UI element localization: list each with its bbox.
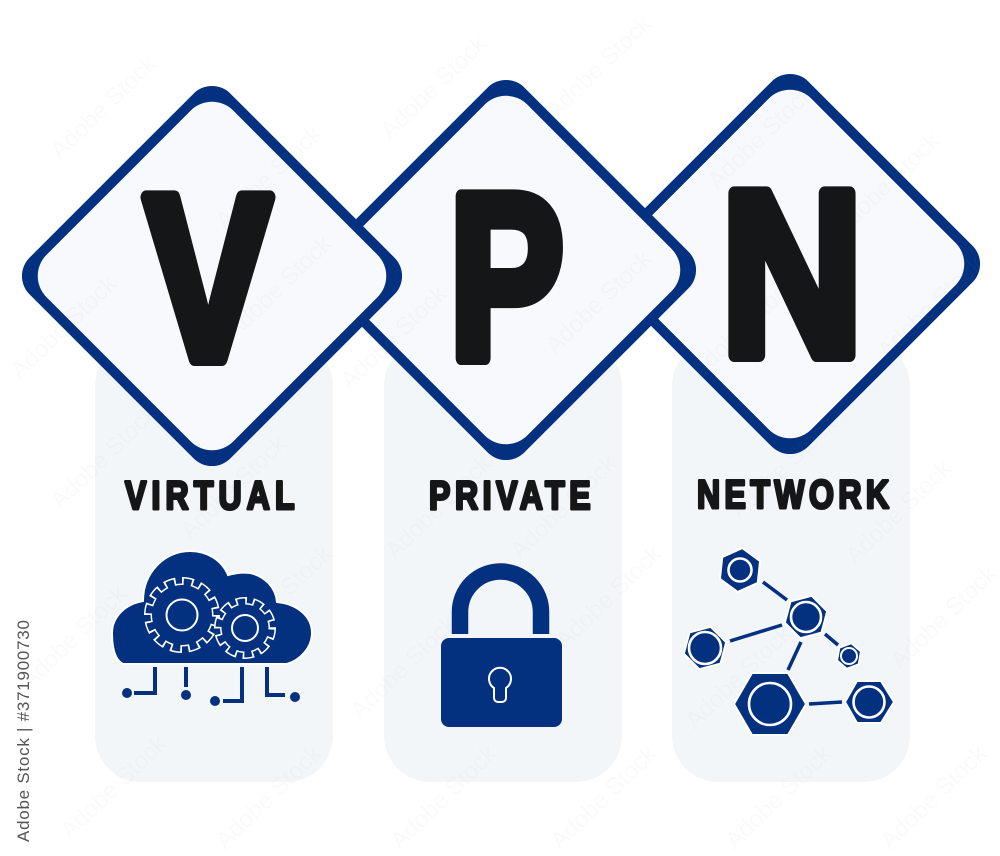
watermark pattern: Adobe Stock — [175, 430, 293, 544]
node left — [681, 622, 729, 674]
watermark pattern: Adobe Stock — [45, 400, 163, 514]
watermark pattern: Adobe Stock — [335, 280, 453, 394]
watermark pattern: Adobe Stock — [220, 230, 338, 344]
letter N: N — [721, 142, 863, 405]
diamond: N — [589, 63, 991, 465]
circuit lines — [122, 667, 300, 706]
watermark pattern: Adobe Stock — [220, 540, 338, 654]
watermark pattern: Adobe Stock — [45, 50, 163, 164]
letter V: V — [145, 148, 271, 410]
watermark pattern: Adobe Stock — [540, 245, 658, 359]
heading: PRIVATE: PRIVATE — [429, 473, 591, 518]
lock body — [441, 638, 562, 727]
watermark pattern: Adobe Stock — [380, 450, 498, 564]
panel: private column — [384, 340, 622, 782]
watermark pattern: Adobe Stock — [540, 10, 658, 124]
heading: NETWORK: NETWORK — [697, 472, 889, 517]
heading: VIRTUAL: VIRTUAL — [125, 473, 295, 518]
watermark pattern: Adobe Stock — [15, 580, 133, 694]
watermark pattern: Adobe Stock — [885, 560, 1000, 674]
icon: padlock — [441, 572, 562, 727]
node right — [845, 681, 894, 723]
node small — [836, 641, 862, 671]
panel: network column — [672, 340, 910, 782]
node large — [734, 673, 806, 735]
small gear — [218, 602, 272, 654]
watermark pattern: Adobe Stock — [385, 740, 503, 854]
watermark pattern: Adobe Stock — [720, 740, 838, 854]
watermark pattern: Adobe Stock — [55, 730, 173, 844]
diamond: V — [11, 75, 413, 477]
watermark pattern: Adobe Stock — [685, 270, 803, 384]
keyhole — [489, 668, 511, 702]
watermark pattern: Adobe Stock — [375, 30, 493, 144]
watermark pattern: Adobe Stock — [545, 740, 663, 854]
watermark pattern: Adobe Stock — [840, 455, 958, 569]
watermark pattern: Adobe Stock — [725, 410, 843, 524]
letter P: P — [449, 146, 564, 408]
connecting lines — [730, 582, 842, 704]
stock image credit: Adobe Stock | #371900730 — [14, 620, 33, 842]
watermark pattern: Adobe Stock — [505, 450, 623, 564]
watermark pattern: Adobe Stock — [828, 127, 946, 241]
cloud shape — [112, 551, 312, 664]
watermark pattern: Adobe Stock — [702, 80, 820, 194]
panel: virtual column — [95, 340, 333, 782]
watermark pattern: Adobe Stock — [345, 610, 463, 724]
watermark pattern: Adobe Stock — [875, 740, 993, 854]
icon: cloud with gears and circuit lines — [112, 551, 312, 706]
watermark pattern: Adobe Stock — [872, 250, 990, 364]
icon: network of hexagon nodes — [681, 546, 894, 735]
node centre — [782, 591, 830, 643]
watermark pattern: Adobe Stock — [5, 270, 123, 384]
diamond: P — [305, 69, 707, 471]
node top — [719, 546, 761, 594]
watermark pattern: Adobe Stock — [210, 120, 328, 234]
watermark pattern: Adobe Stock — [680, 620, 798, 734]
watermark pattern: Adobe Stock — [550, 540, 668, 654]
watermark pattern: Adobe Stock — [210, 740, 328, 854]
shackle — [460, 572, 541, 634]
large gear — [148, 582, 216, 648]
